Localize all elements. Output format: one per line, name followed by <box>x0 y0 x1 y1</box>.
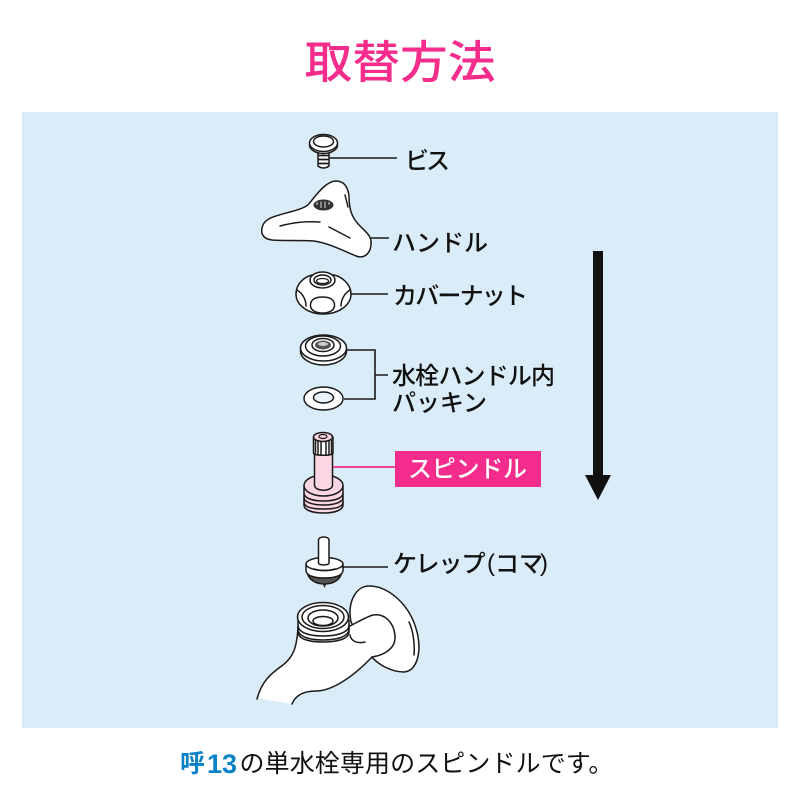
label: kerep: ( <box>487 550 495 577</box>
icon: cover nut <box>296 272 351 314</box>
panel: background <box>22 112 778 728</box>
icon: spindle <box>304 432 343 513</box>
leader: spindle <box>333 466 395 468</box>
leader: handle <box>371 237 389 239</box>
label: handle packing: パッキン <box>392 390 487 417</box>
icon: faucet <box>257 586 419 704</box>
title: 取替方法 <box>304 37 496 88</box>
icon: screw <box>310 134 338 168</box>
label: kerep: ) <box>540 550 548 577</box>
leader: screw <box>329 157 397 159</box>
label: kerep: コマ <box>495 551 543 578</box>
label: screw: ビス <box>405 148 450 175</box>
leader: kerep <box>342 566 388 568</box>
icon: packing washer <box>304 387 343 410</box>
icon: handle ring <box>300 335 346 365</box>
icon: kerep valve <box>306 537 343 588</box>
label: handle: ハンドル <box>392 230 488 257</box>
label: spindle tag <box>395 451 541 487</box>
label: handle packing: 水栓ハンドル内 <box>392 363 555 390</box>
icon: handle <box>262 181 371 257</box>
label: cover nut: カバーナット <box>393 283 528 310</box>
caption: 呼 <box>180 750 205 778</box>
leader: cover nut <box>351 293 388 295</box>
caption: 13 <box>207 749 237 779</box>
label: kerep: ケレップ <box>393 551 486 578</box>
label: handle packing <box>392 363 555 417</box>
caption: の単水栓専用のスピンドルです。 <box>240 750 614 778</box>
arrow: removal direction <box>585 251 611 500</box>
label: spindle tag: スピンドル <box>408 456 527 483</box>
leader: bracket <box>344 350 388 399</box>
